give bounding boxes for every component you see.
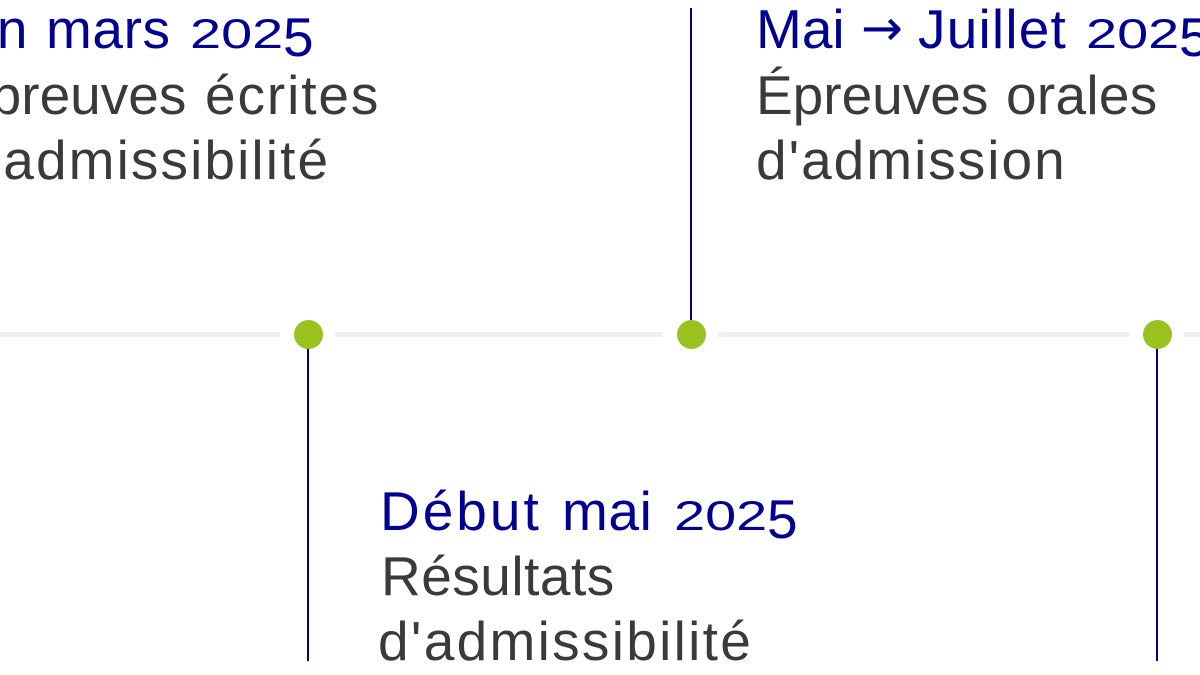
description: épreuves orales d'admission: d'admission — [756, 129, 1067, 191]
description: résultats d'admissibilité — [378, 545, 753, 672]
date: début mai 2025: Début — [380, 480, 542, 542]
connector line — [690, 8, 692, 320]
date: début mai 2025: 5 — [767, 488, 798, 550]
description: épreuves orales d'admission: orales — [1006, 64, 1158, 126]
description: résultats d'admissibilité: d'admissibilité — [378, 610, 753, 672]
date: fin mars 2025: 5 — [283, 6, 314, 68]
milestone: début mai 2025 — [294, 320, 798, 672]
date: fin mars 2025 — [0, 0, 314, 68]
date: début mai 2025: 202 — [674, 492, 767, 539]
milestone: next step marker — [1143, 320, 1172, 661]
description: épreuves orales d'admission: Épreuves — [756, 64, 988, 126]
description: résultats d'admissibilité: Résultats — [381, 545, 615, 607]
date: début mai 2025: mai — [562, 480, 652, 542]
date: fin mars 2025: 202 — [190, 10, 283, 57]
marker dot — [294, 320, 323, 349]
date: mai à juillet 2025: → — [861, 0, 903, 57]
milestone: fin mars 2025 — [0, 0, 380, 191]
milestone: mai à juillet 2025 — [677, 0, 1200, 349]
date: mai à juillet 2025 — [756, 0, 1200, 68]
marker dot — [677, 320, 706, 349]
connector line — [307, 335, 309, 661]
date: début mai 2025 — [380, 480, 798, 550]
description: épreuves écrites d'admissibilité: écrites — [205, 64, 380, 126]
date: mai à juillet 2025: 202 — [1086, 10, 1179, 57]
description: épreuves orales d'admission — [756, 64, 1158, 191]
description: épreuves écrites d'admissibilité — [0, 64, 380, 191]
marker dot — [1143, 320, 1172, 349]
timeline axis — [0, 332, 1200, 337]
connector line — [1156, 335, 1158, 661]
